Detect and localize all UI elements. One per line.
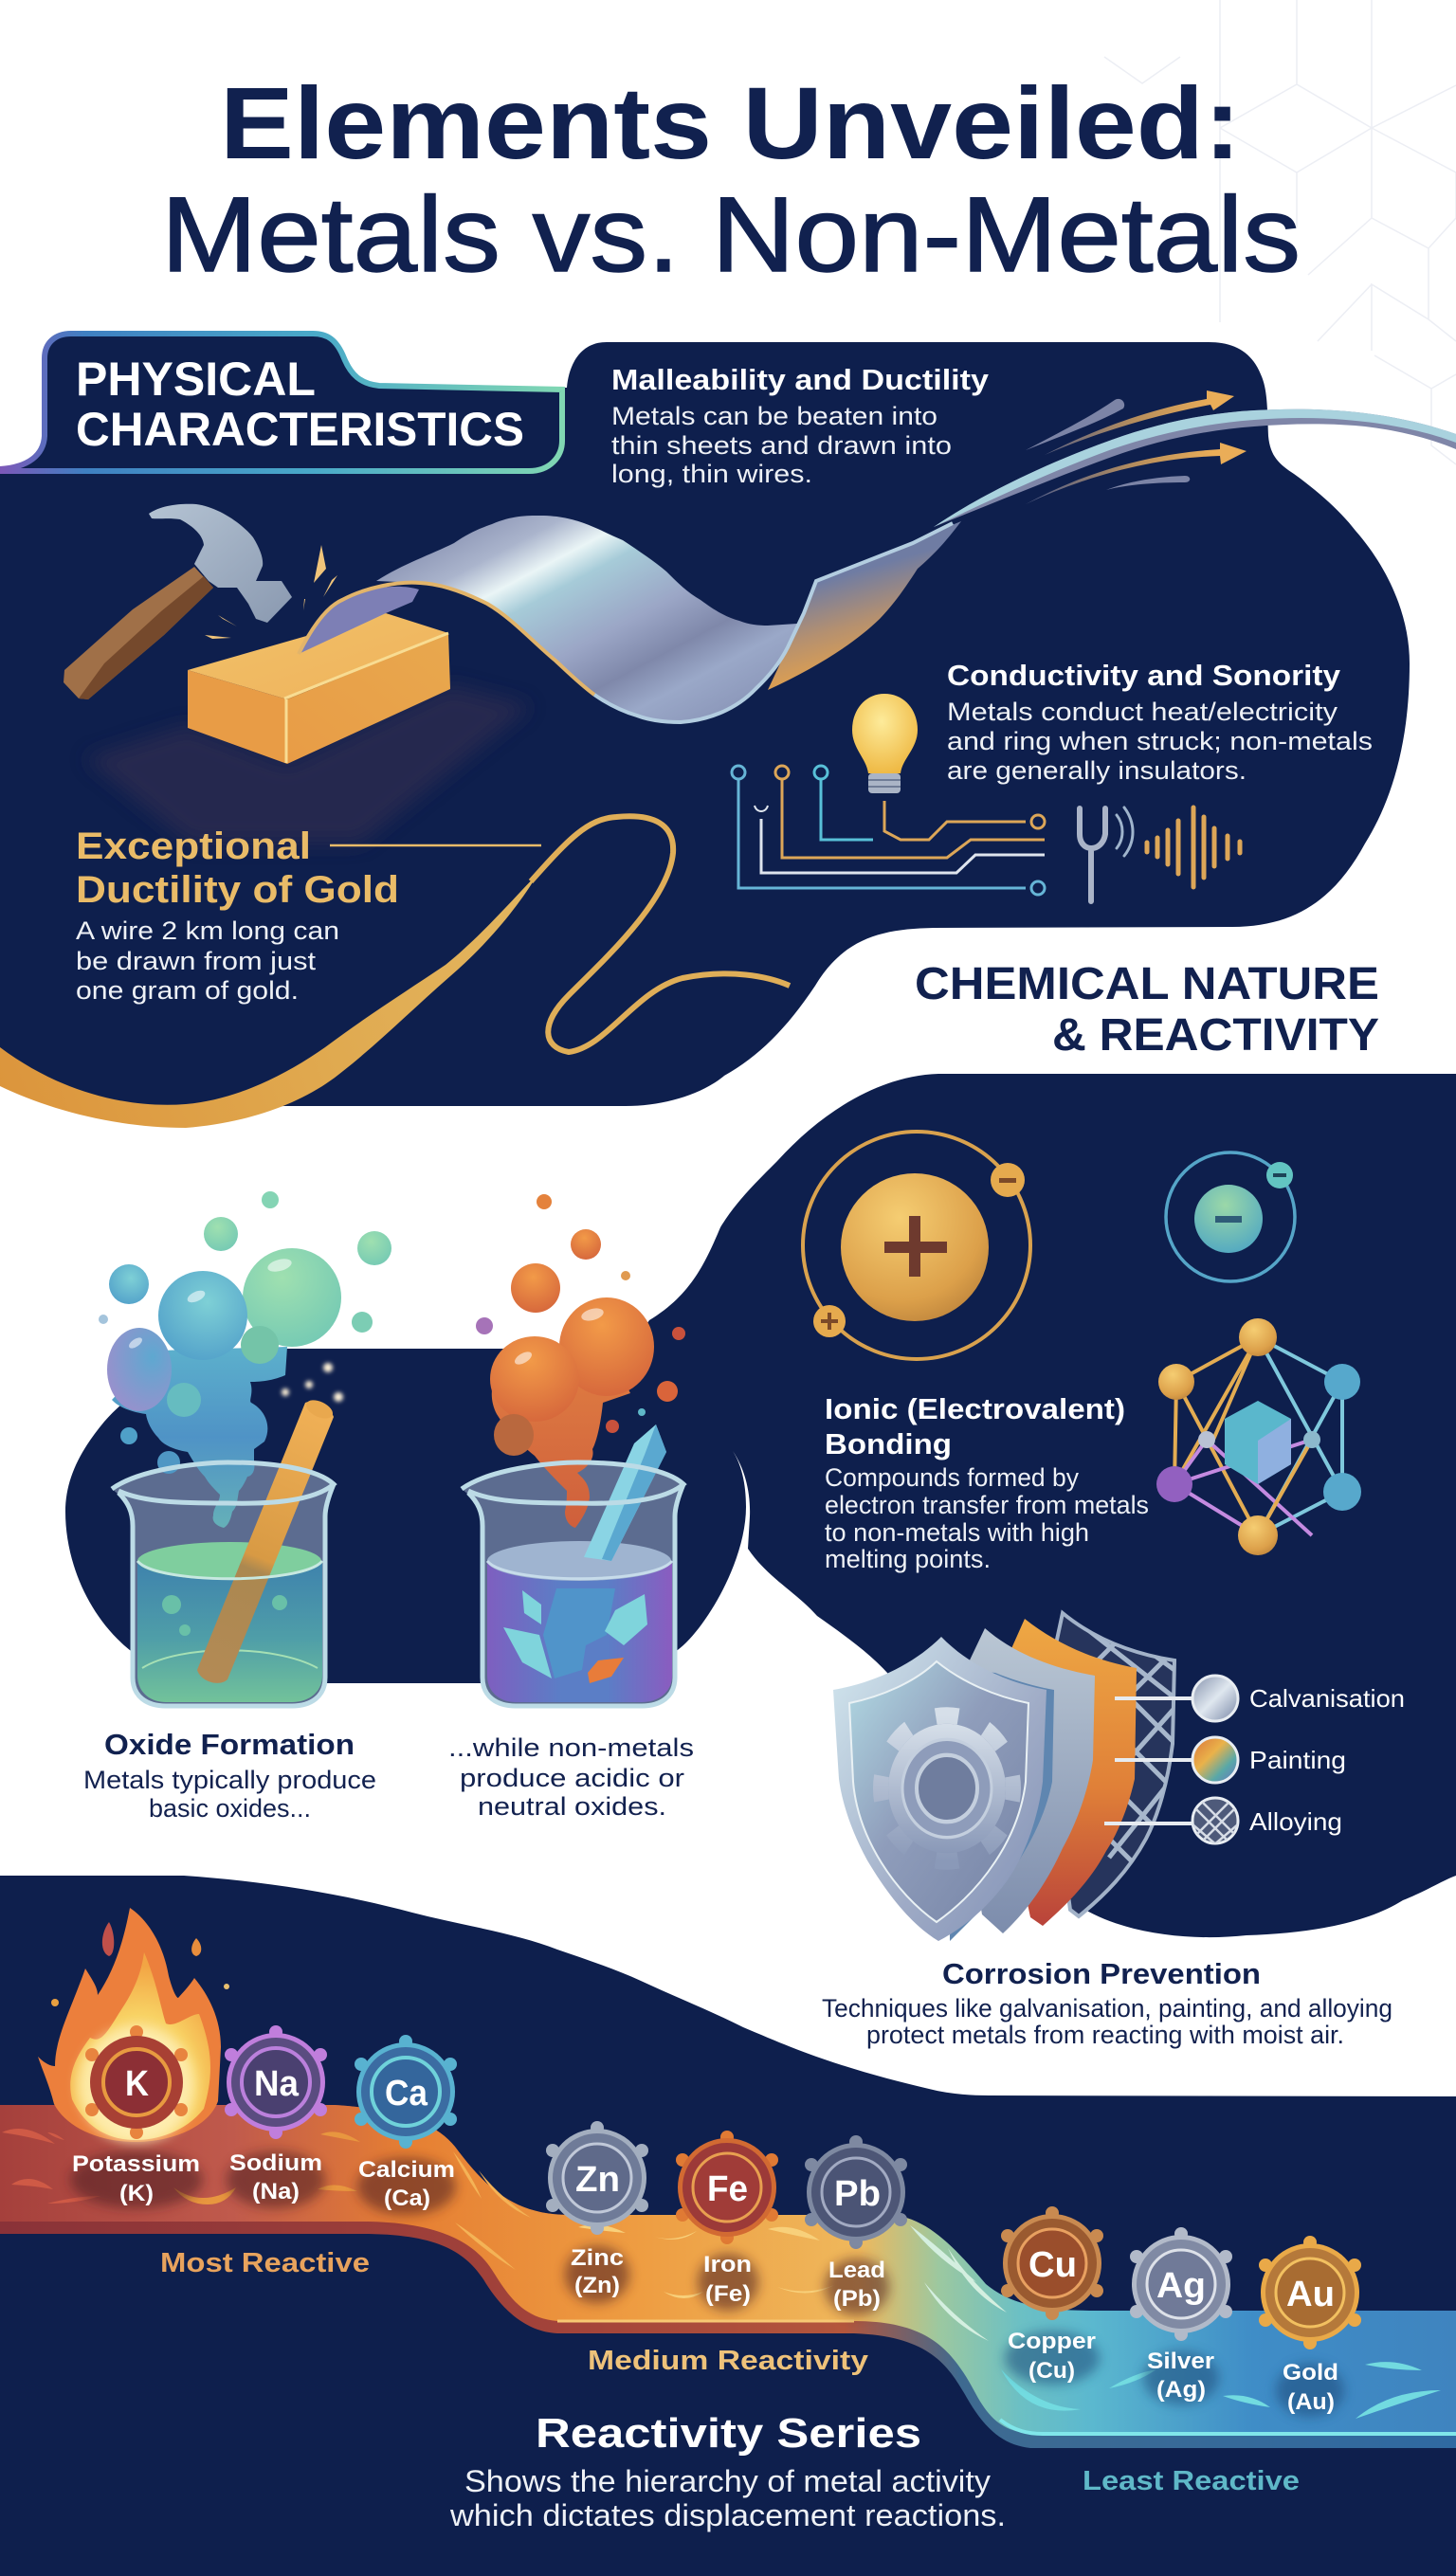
text: element names: Calcium	[358, 2157, 455, 2183]
text: exceptional ductility of gold	[76, 825, 541, 1005]
text: element names: (Zn)	[574, 2273, 620, 2298]
text: element names: (Cu)	[1028, 2358, 1075, 2384]
text: malleability and ductility: Malleability and Ductility	[611, 363, 990, 396]
text: ionic bonding: electron transfer from metals	[825, 1491, 1149, 1519]
text: non-metal oxides: produce acidic or	[460, 1764, 684, 1792]
icon: gear	[881, 1715, 1013, 1861]
panel background	[0, 335, 1410, 1111]
panel background	[65, 1074, 1456, 1937]
illustration: beaker with non-metal oxide	[462, 1194, 685, 1706]
text: reactivity series: Reactivity Series	[536, 2410, 921, 2457]
text: corrosion prevention	[822, 1957, 1392, 2049]
icon: flame	[38, 1908, 229, 2144]
text: protection labels: Painting	[1249, 1746, 1346, 1774]
text: element names: Iron	[703, 2252, 752, 2277]
icon: tuning fork and sound wave	[1080, 807, 1240, 901]
text: reactivity series	[449, 2410, 1006, 2532]
text: element names: (Fe)	[705, 2281, 751, 2307]
icon: element coin calcium	[355, 2035, 457, 2149]
illustration: gold wire	[0, 816, 790, 1128]
text: ionic bonding: Bonding	[825, 1427, 952, 1460]
icon: element coin silver: Ag	[1156, 2266, 1206, 2306]
icon: layered shield	[833, 1602, 1238, 1941]
panel: reactivity series	[0, 1876, 1456, 2576]
sub-label: connectors	[1104, 1698, 1192, 1823]
text: element names: (Pb)	[833, 2286, 881, 2312]
title	[161, 65, 1301, 294]
icon: element coin sodium: Na	[254, 2064, 300, 2104]
liquid and crystals	[487, 1424, 672, 1702]
text: exceptional ductility of gold: be drawn from just	[76, 947, 317, 975]
text: element names: Lead	[828, 2258, 885, 2283]
section label: physical characteristics: CHARACTERISTICS	[76, 403, 524, 456]
icon: atom with negative ion	[1166, 1152, 1295, 1281]
glass back	[112, 1462, 334, 1706]
icon: element coin iron	[676, 2131, 778, 2244]
chart: circuit lines	[732, 766, 1045, 895]
plume of bubbles	[99, 1191, 391, 1528]
icon: element coin copper	[1001, 2206, 1103, 2320]
sub-label: label halos	[70, 2151, 1344, 2417]
glass outline	[112, 1462, 334, 1706]
icon: crystal lattice	[1156, 1318, 1361, 1555]
text: element names: (Ca)	[384, 2186, 430, 2211]
text: oxide formation: Oxide Formation	[104, 1728, 355, 1761]
plume of bubbles	[476, 1194, 685, 1528]
text: element names	[72, 2150, 1338, 2415]
illustration: beaker with metal oxide	[99, 1191, 391, 1706]
text: oxide formation	[83, 1728, 376, 1823]
text: protection labels	[1249, 1684, 1405, 1836]
panel: chemical nature	[65, 1074, 1456, 1941]
text: conductivity and sonority: Conductivity and Sonority	[947, 659, 1341, 692]
text: reactivity series: Shows the hierarchy of metal activity	[464, 2464, 991, 2498]
icon: hammer	[64, 504, 337, 699]
icon: element coin lead	[805, 2135, 907, 2249]
icon: element coin zinc	[546, 2121, 648, 2235]
section heading: chemical nature and reactivity	[915, 959, 1379, 1061]
text: ionic bonding	[825, 1392, 1149, 1573]
panel background	[0, 1876, 1456, 2576]
text: non-metal oxides: ...while non-metals	[448, 1733, 694, 1762]
text: element names: Zinc	[571, 2245, 624, 2271]
icon: element coin silver	[1130, 2227, 1232, 2341]
text: malleability and ductility: Metals can be beaten into	[611, 402, 937, 430]
text: reactivity series: which dictates displacement reactions.	[449, 2498, 1006, 2532]
title: Elements Unveiled:	[220, 65, 1241, 180]
text: exceptional ductility of gold: Ductility of Gold	[76, 869, 399, 911]
label: least reactive: Least Reactive	[1083, 2466, 1300, 2496]
text: exceptional ductility of gold: Exceptional	[76, 825, 311, 867]
section heading: chemical nature and reactivity: & REACTIVITY	[1052, 1010, 1379, 1061]
text: element names: Potassium	[72, 2151, 200, 2177]
icon: element coin calcium: Ca	[385, 2074, 428, 2113]
text: element names: Sodium	[229, 2150, 322, 2176]
text: exceptional ductility of gold: one gram of gold.	[76, 976, 299, 1005]
text: element names: Gold	[1283, 2360, 1338, 2386]
text: oxide formation: Metals typically produce	[83, 1766, 376, 1794]
icon: gold bar	[85, 613, 531, 844]
icon: motion arrows	[1026, 390, 1247, 504]
text: corrosion prevention: protect metals from reacting with moist air.	[866, 2021, 1344, 2049]
glass back	[462, 1462, 683, 1706]
icon: element coin iron: Fe	[707, 2169, 748, 2209]
text: element names: (Na)	[252, 2179, 300, 2204]
icon: alloying swatch	[1192, 1798, 1238, 1846]
label: most reactive: Most Reactive	[160, 2248, 370, 2278]
text: conductivity and sonority: are generally insulators.	[947, 756, 1247, 785]
section label: physical characteristics: PHYSICAL	[76, 353, 316, 406]
icon: element coin lead: Pb	[834, 2174, 881, 2214]
glass outline	[462, 1462, 683, 1706]
liquid and rod	[137, 1396, 336, 1702]
text: ionic bonding: melting points.	[825, 1545, 991, 1573]
text: corrosion prevention: Techniques like galvanisation, painting, and alloying	[822, 1994, 1392, 2023]
icon: atom with positive ion	[803, 1132, 1030, 1359]
text: ionic bonding: to non-metals with high	[825, 1518, 1089, 1547]
text: malleability and ductility	[611, 363, 990, 488]
text: element names: (Ag)	[1156, 2377, 1206, 2403]
text: malleability and ductility: thin sheets and drawn into	[611, 431, 952, 460]
icon: element coin sodium	[225, 2025, 327, 2139]
text: conductivity and sonority: and ring when struck; non-metals	[947, 727, 1373, 755]
text: non-metal oxides: neutral oxides.	[478, 1792, 666, 1821]
icon: element coin zinc: Zn	[575, 2160, 620, 2200]
text: malleability and ductility: long, thin wires.	[611, 460, 812, 488]
icon: painting swatch	[1192, 1737, 1238, 1783]
text: ionic bonding: Ionic (Electrovalent)	[825, 1392, 1125, 1425]
icon: element coin gold: Au	[1286, 2275, 1335, 2314]
text: element names: (K)	[119, 2181, 154, 2206]
text: corrosion prevention: Corrosion Prevention	[942, 1957, 1261, 1990]
text: element names: (Au)	[1287, 2389, 1335, 2415]
icon: element coin gold	[1259, 2236, 1361, 2349]
chart: reactivity river	[0, 2105, 1456, 2448]
text: conductivity and sonority: Metals conduct heat/electricity	[947, 698, 1338, 726]
icon: element coin potassium: K	[125, 2064, 149, 2104]
text: protection labels: Alloying	[1249, 1807, 1342, 1836]
text: element names: Copper	[1008, 2329, 1096, 2354]
text: conductivity and sonority	[947, 659, 1373, 785]
icon: galvanisation swatch	[1192, 1676, 1238, 1721]
icon: element coin copper: Cu	[1028, 2245, 1077, 2285]
text: exceptional ductility of gold: A wire 2 km long can	[76, 916, 339, 945]
sub-label: river currents	[2, 2129, 1456, 2434]
decorative hexagon pattern	[1104, 0, 1456, 464]
section label: physical characteristics	[0, 334, 562, 471]
icon: element coin potassium	[85, 2025, 188, 2139]
label: medium reactivity: Medium Reactivity	[588, 2346, 868, 2376]
text: element names: Silver	[1147, 2349, 1214, 2374]
text: protection labels: Calvanisation	[1249, 1684, 1405, 1713]
panel: physical characteristics	[0, 334, 1456, 1128]
section heading: chemical nature and reactivity: CHEMICAL NATURE	[915, 959, 1379, 1009]
title: Metals vs. Non-Metals	[161, 175, 1301, 294]
illustration: metal sheet being rolled	[299, 409, 1456, 722]
text: ionic bonding: Compounds formed by	[825, 1463, 1079, 1492]
text: non-metal oxides	[448, 1733, 694, 1821]
icon: light bulb	[852, 694, 918, 793]
text: oxide formation: basic oxides...	[149, 1794, 311, 1823]
